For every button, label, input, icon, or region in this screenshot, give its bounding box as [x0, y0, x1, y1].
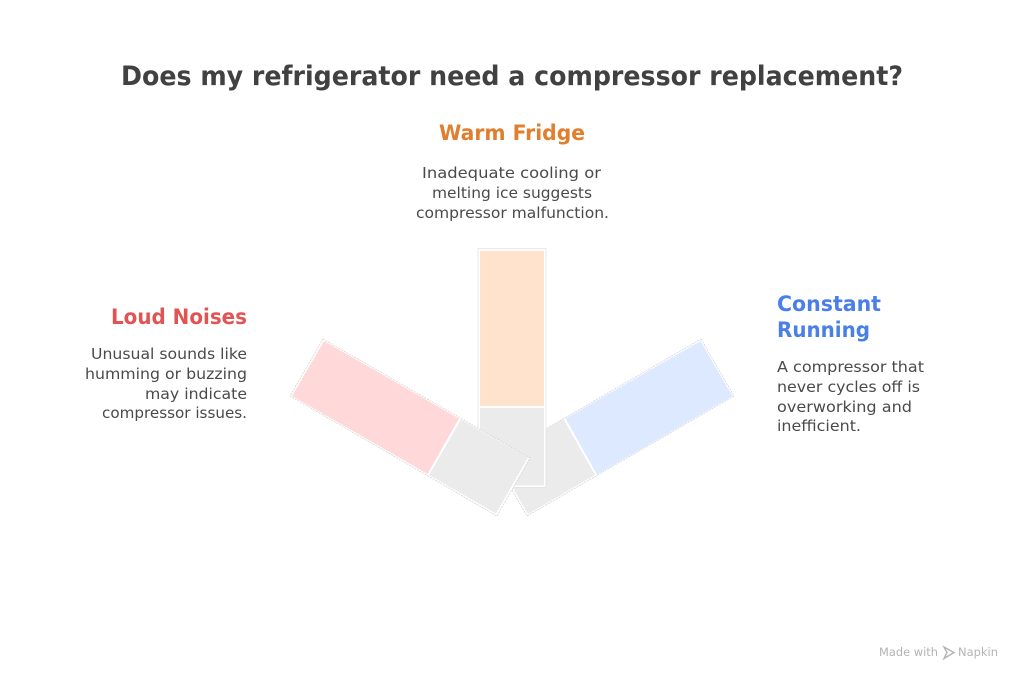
description: Loud Noises: humming or buzzing	[85, 365, 247, 383]
heading: Constant Running	[777, 292, 881, 342]
panel: orange blade (Warm Fridge)	[478, 248, 546, 488]
heading: Loud Noises: Loud Noises	[111, 305, 247, 329]
description: Loud Noises: may indicate	[145, 385, 247, 403]
description: Constant Running: inefficient.	[777, 417, 861, 435]
description: Loud Noises: compressor issues.	[102, 404, 247, 422]
panel: red blade (Loud Noises)	[290, 339, 530, 516]
title: Does my refrigerator need a compressor replacement?	[121, 61, 903, 92]
description: Warm Fridge: melting ice suggests	[432, 184, 592, 202]
description: Loud Noises	[85, 345, 247, 422]
watermark: Made with Napkin: Napkin	[958, 645, 998, 659]
description: Constant Running: overworking and	[777, 398, 912, 416]
fan diagram	[290, 248, 734, 516]
description: Constant Running: A compressor that	[777, 358, 924, 376]
icon: Napkin logo	[944, 647, 954, 658]
watermark: Made with Napkin: Made with	[879, 645, 938, 659]
description: Constant Running	[777, 358, 924, 435]
description: Constant Running: never cycles off is	[777, 378, 920, 396]
heading: Constant Running: Constant	[777, 292, 881, 316]
text block: Warm Fridge	[416, 121, 609, 222]
heading: Constant Running: Running	[777, 318, 870, 342]
description: Warm Fridge: Inadequate cooling or	[422, 164, 602, 182]
watermark: Made with Napkin	[879, 645, 998, 659]
text block: Constant Running	[777, 292, 924, 435]
description: Warm Fridge: compressor malfunction.	[416, 204, 609, 222]
description: Warm Fridge	[416, 164, 609, 222]
heading: Warm Fridge: Warm Fridge	[439, 121, 585, 145]
description: Loud Noises: Unusual sounds like	[91, 345, 247, 363]
text block: Loud Noises	[85, 305, 247, 422]
panel: blue blade (Constant Running)	[494, 339, 734, 516]
